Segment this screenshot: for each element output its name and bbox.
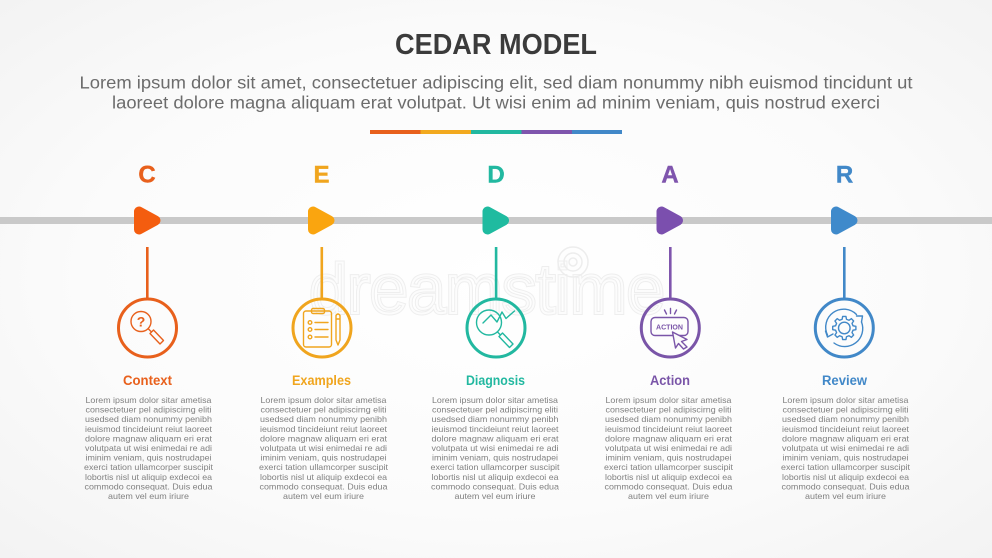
- description Diagnosis: Lorem ipsum dolor sitar ametisa: [432, 396, 558, 405]
- description Context: usedsed diam nonummy penibh: [85, 415, 212, 424]
- letter E: E: [313, 162, 330, 188]
- description Action: [604, 396, 734, 501]
- description Context: volutpata ut wisi enimedai re adi: [85, 444, 212, 453]
- description Diagnosis: dolore magnaw aliquam eri erat: [432, 434, 559, 443]
- description Action: volutpata ut wisi enimedai re adi: [605, 444, 732, 453]
- description Diagnosis: ieuismod tincideiunt reiut laoreet: [432, 425, 559, 434]
- description Examples: volutpata ut wisi enimedai re adi: [260, 444, 387, 453]
- triangle marker D: [488, 212, 504, 230]
- description Diagnosis: autem vel eum iriure: [454, 492, 536, 501]
- description Examples: dolore magnaw aliquam eri erat: [260, 434, 388, 443]
- description Action: ieuismod tincideiunt reiut laoreet: [605, 425, 733, 434]
- connector R: [843, 247, 846, 299]
- description Action: consectetuer pel adipiscirng eliti: [606, 406, 732, 415]
- description Examples: exerci tation ullamcorper suscipit: [259, 463, 389, 472]
- description Diagnosis: [430, 396, 560, 501]
- description Action: Lorem ipsum dolor sitar ametisa: [605, 396, 732, 405]
- description Diagnosis: usedsed diam nonummy penibh: [432, 415, 559, 424]
- watermark: dreamstime: [310, 250, 664, 328]
- description Context: iminim veniam, quis nostrudapei: [86, 454, 212, 463]
- description Diagnosis: exerci tation ullamcorper suscipit: [430, 463, 560, 472]
- heading Review: Review: [822, 373, 867, 388]
- icon: magnifier with trend line: [467, 299, 525, 357]
- description Action: exerci tation ullamcorper suscipit: [604, 463, 734, 472]
- subtitle: Lorem ipsum dolor sit amet, consectetuer adipiscing elit, sed diam nonummy nibh euismod tincidunt ut: [80, 72, 913, 92]
- letter D: D: [487, 162, 505, 188]
- description Context: [84, 396, 214, 501]
- description Context: lobortis nisl ut aliquip exdecoi ea: [85, 473, 212, 482]
- description Action: iminim veniam, quis nostrudapei: [606, 454, 732, 463]
- description Review: autem vel eum iriure: [805, 492, 886, 501]
- description Context: autem vel eum iriure: [108, 492, 189, 501]
- description Action: usedsed diam nonummy penibh: [605, 415, 732, 424]
- connector C: [146, 247, 149, 299]
- watermark: dreamstime: [310, 250, 664, 328]
- letter A: A: [661, 162, 679, 188]
- description Review: consectetuer pel adipiscirng eliti: [782, 406, 909, 415]
- timeline bar: [0, 217, 992, 224]
- description Review: Lorem ipsum dolor sitar ametisa: [782, 396, 909, 405]
- description Context: Lorem ipsum dolor sitar ametisa: [85, 396, 212, 405]
- description Review: dolore magnaw aliquam eri erat: [782, 434, 910, 443]
- step E: Examples: [259, 162, 389, 501]
- description Diagnosis: commodo consequat. Duis edua: [431, 482, 559, 491]
- letter C: C: [138, 162, 156, 188]
- description Context: commodo consequat. Duis edua: [84, 482, 213, 491]
- description Review: iminim veniam, quis nostrudapei: [783, 454, 909, 463]
- description Examples: Lorem ipsum dolor sitar ametisa: [260, 396, 387, 405]
- triangle marker C: [139, 212, 156, 230]
- connector A: [669, 247, 672, 299]
- connector E: [320, 247, 323, 299]
- icon: action button with cursor: ACTION: [656, 322, 683, 332]
- description Review: lobortis nisl ut aliquip exdecoi ea: [782, 473, 909, 482]
- heading Context: Context: [123, 373, 172, 388]
- step C: Context: [84, 162, 214, 501]
- description Action: dolore magnaw aliquam eri erat: [605, 434, 733, 443]
- subtitle: laoreet dolore magna aliquam erat volutpat. Ut wisi enim ad minim veniam, quis nostrud exerci: [112, 92, 880, 112]
- heading Diagnosis: Diagnosis: [466, 373, 525, 388]
- description Examples: lobortis nisl ut aliquip exdecoi ea: [260, 473, 387, 482]
- description Review: volutpata ut wisi enimedai re adi: [782, 444, 909, 453]
- icon: clipboard and pencil: [293, 299, 351, 357]
- description Context: consectetuer pel adipiscirng eliti: [86, 406, 212, 415]
- subtitle: [80, 72, 913, 112]
- icon: magnifier with question mark: [118, 299, 176, 357]
- description Diagnosis: iminim veniam, quis nostrudapei: [432, 454, 558, 463]
- description Diagnosis: volutpata ut wisi enimedai re adi: [432, 444, 559, 453]
- step R: Review: [781, 162, 911, 501]
- description Action: autem vel eum iriure: [628, 492, 709, 501]
- colored title divider: [370, 130, 622, 134]
- description Diagnosis: lobortis nisl ut aliquip exdecoi ea: [432, 473, 559, 482]
- icon: action button with cursor: [641, 299, 699, 357]
- description Examples: [259, 396, 389, 501]
- description Context: ieuismod tincideiunt reiut laoreet: [85, 425, 213, 434]
- description Review: commodo consequat. Duis edua: [782, 482, 910, 491]
- step D: Diagnosis: [430, 162, 560, 501]
- description Review: usedsed diam nonummy penibh: [782, 415, 909, 424]
- description Diagnosis: consectetuer pel adipiscirng eliti: [432, 406, 558, 415]
- letter R: R: [836, 162, 853, 188]
- icon: magnifier with question mark: ?: [137, 314, 145, 330]
- triangle marker R: [836, 212, 852, 230]
- description Examples: autem vel eum iriure: [283, 492, 364, 501]
- description Context: exerci tation ullamcorper suscipit: [84, 463, 214, 472]
- triangle marker E: [313, 212, 330, 230]
- description Examples: iminim veniam, quis nostrudapei: [261, 454, 387, 463]
- description Review: exerci tation ullamcorper suscipit: [781, 463, 911, 472]
- heading Examples: Examples: [292, 373, 351, 388]
- step A: Action: [604, 162, 734, 501]
- description Examples: commodo consequat. Duis edua: [260, 482, 388, 491]
- description Examples: consectetuer pel adipiscirng eliti: [260, 406, 387, 415]
- connector D: [495, 247, 497, 299]
- description Review: [781, 396, 911, 501]
- description Action: commodo consequat. Duis edua: [604, 482, 733, 491]
- description Examples: ieuismod tincideiunt reiut laoreet: [260, 425, 388, 434]
- description Action: lobortis nisl ut aliquip exdecoi ea: [605, 473, 732, 482]
- icon: gear with circular arrows: [815, 299, 873, 357]
- description Review: ieuismod tincideiunt reiut laoreet: [782, 425, 910, 434]
- description Examples: usedsed diam nonummy penibh: [260, 415, 387, 424]
- description Context: dolore magnaw aliquam eri erat: [85, 434, 213, 443]
- heading Action: Action: [650, 373, 690, 388]
- title: CEDAR MODEL: [395, 29, 597, 61]
- triangle marker A: [662, 212, 678, 230]
